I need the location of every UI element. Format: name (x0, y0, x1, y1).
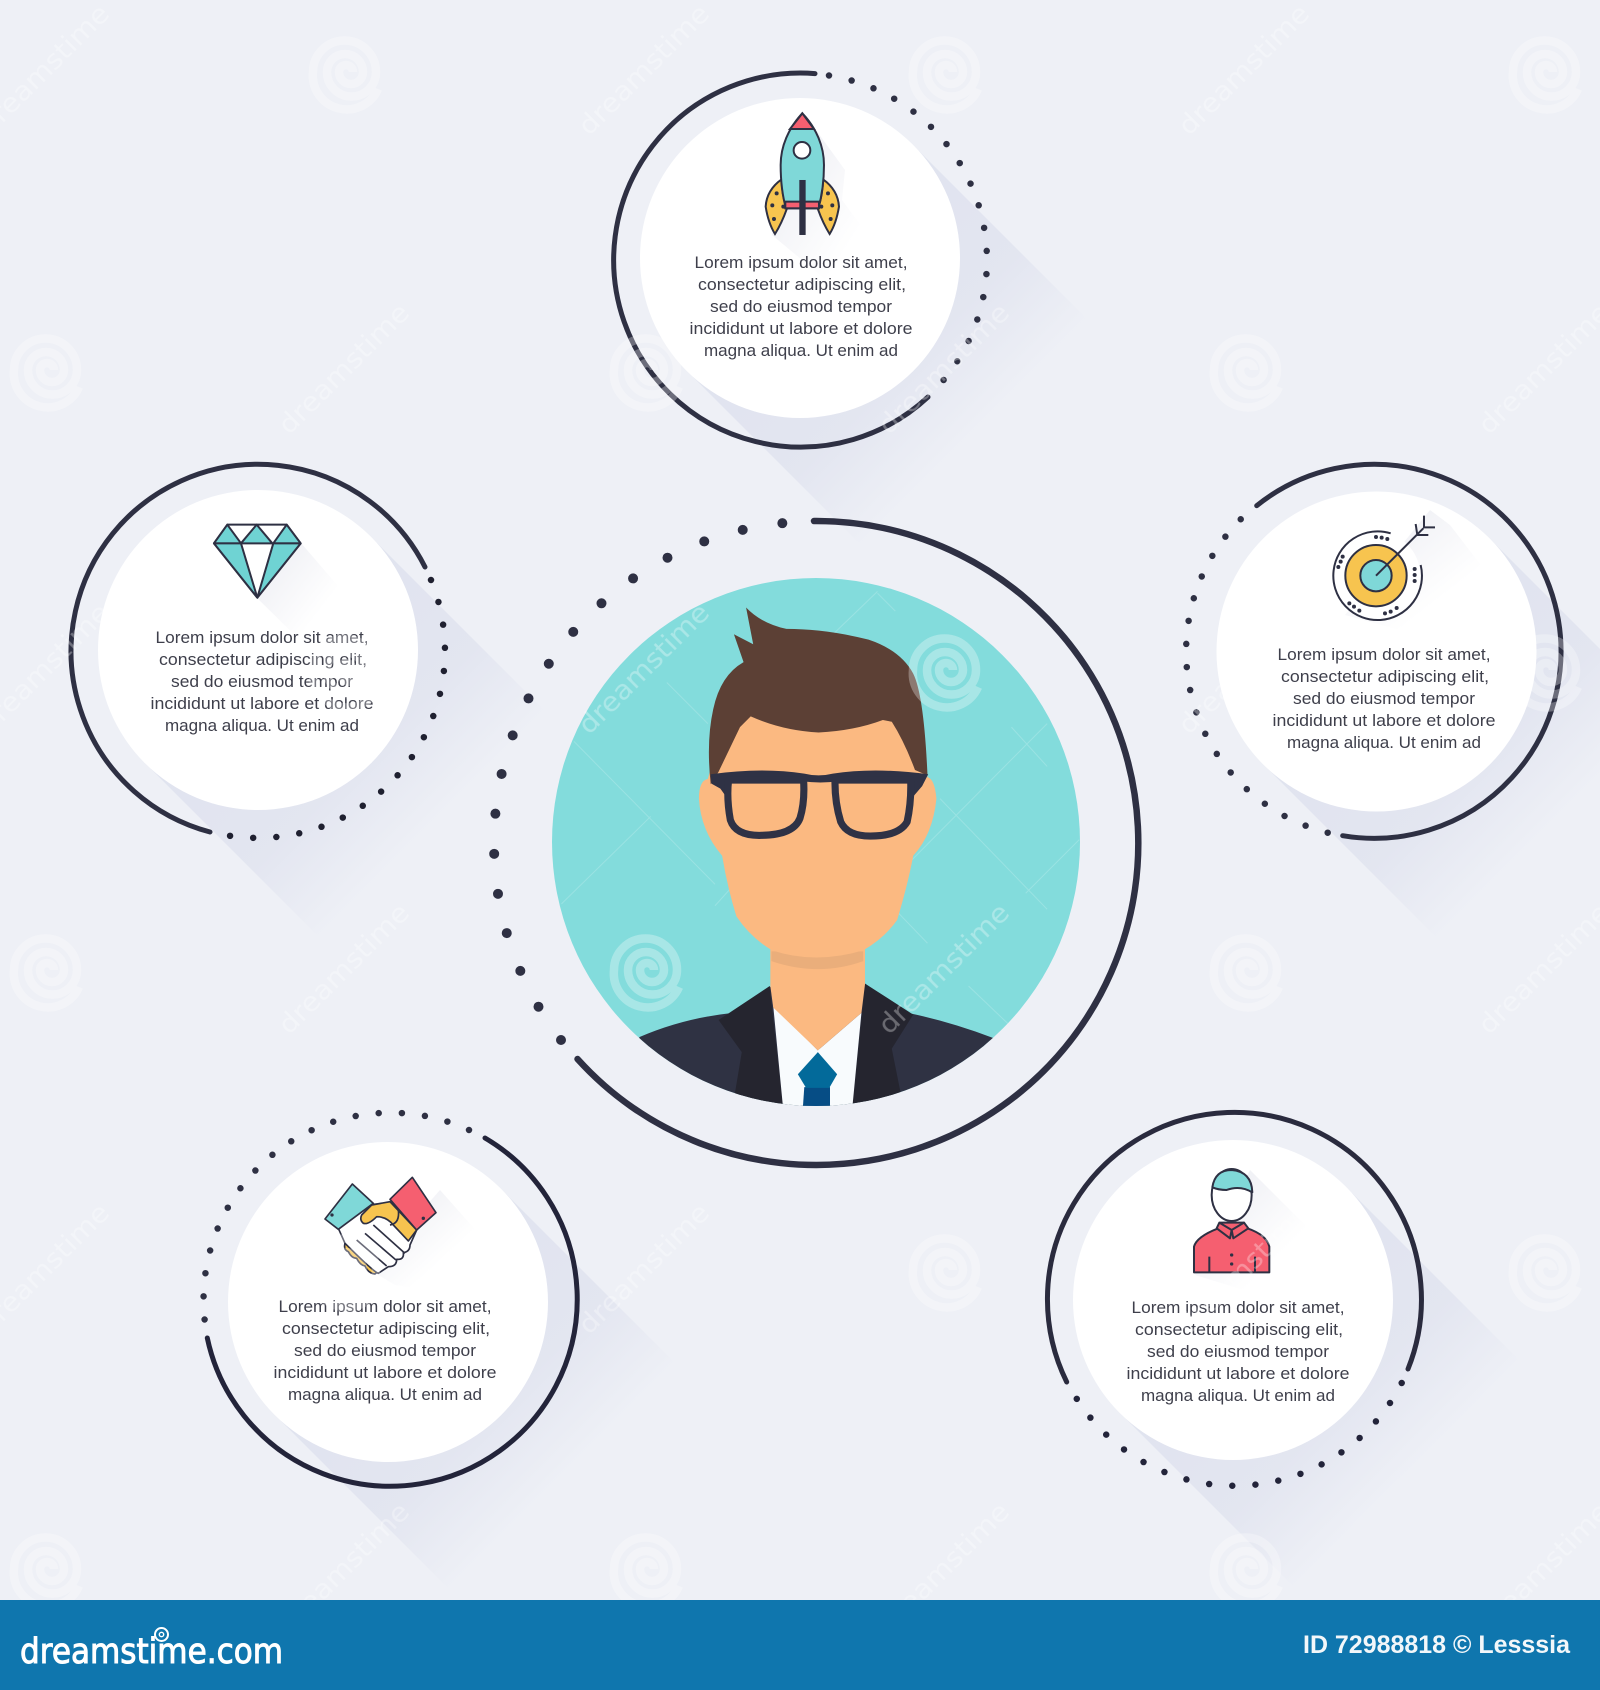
text block: magna aliqua. Ut enim ad (1287, 733, 1481, 752)
watermark overlay: dreamstime (872, 297, 1016, 441)
avatar figure (561, 591, 1079, 1141)
icon shadow (370, 1190, 480, 1290)
text block: consectetur adipiscing elit, (1281, 667, 1489, 686)
text block: sed do eiusmod tempor (294, 1341, 476, 1360)
text block: incididunt ut labore et dolore (1272, 711, 1496, 730)
ring dotted arc (204, 1113, 469, 1323)
ring solid arc (207, 1138, 577, 1486)
text block: Lorem ipsum dolor sit amet, (694, 253, 908, 272)
icon: handshake (325, 1177, 436, 1274)
ring dotted arc (228, 580, 445, 838)
shirt collar (773, 1006, 861, 1106)
ring dotted arc (829, 76, 987, 383)
watermark overlay: dreamstime (872, 1496, 1016, 1640)
watermark overlay: dreamstime (1172, 0, 1316, 142)
text block: sed do eiusmod tempor (1293, 689, 1475, 708)
text block: magna aliqua. Ut enim ad (704, 341, 898, 360)
ring solid arc (1047, 1112, 1421, 1382)
suit (639, 984, 993, 1106)
tie (803, 1087, 830, 1106)
white disc (1073, 1140, 1393, 1460)
text block: Lorem ipsum dolor sit amet, (1278, 645, 1490, 664)
watermark overlay: dreamstime (872, 897, 1016, 1041)
text block (150, 628, 374, 735)
text block: Lorem ipsum dolor sit amet, (278, 1297, 492, 1316)
ring solid arc (614, 73, 928, 447)
glasses (711, 771, 928, 836)
hair (709, 607, 927, 784)
watermark overlay: dreamstime (272, 297, 416, 441)
icon: diamond (214, 525, 301, 598)
long shadow (687, 145, 1153, 611)
white disc (98, 490, 418, 810)
text block: consectetur adipiscing elit, (1135, 1320, 1343, 1339)
head (699, 713, 936, 957)
icon: target (1332, 516, 1435, 620)
icon: rocket (766, 113, 839, 235)
ring dotted arc (1186, 517, 1328, 833)
panel: diamond (71, 464, 611, 1003)
white disc (228, 1142, 548, 1462)
neck (770, 941, 865, 1050)
text block: sed do eiusmod tempor (710, 297, 892, 316)
panel: target (1186, 464, 1600, 1004)
teal disc (552, 578, 1080, 1106)
panel: handshake (204, 1113, 741, 1655)
text block: Lorem ipsum dolor sit amet, (1132, 1298, 1344, 1317)
watermark overlay: dreamstime (572, 1197, 716, 1341)
long shadow (1263, 538, 1600, 1004)
text block (690, 253, 912, 360)
long shadow (145, 537, 611, 1003)
text block: sed do eiusmod tempor (1147, 1342, 1329, 1361)
text block: Lorem ipsum dolor sit amet, (156, 628, 368, 647)
lapels (719, 984, 913, 1106)
icon shadow (772, 115, 890, 300)
text block: magna aliqua. Ut enim ad (165, 716, 359, 735)
white disc (1216, 492, 1536, 812)
text block: consectetur adipiscing elit, (698, 275, 906, 294)
watermark overlay: dreamstime (572, 597, 716, 741)
icon shadow (1345, 510, 1500, 630)
panel: person (1047, 1112, 1586, 1653)
ring solid arc (71, 464, 425, 832)
watermark overlay: dreamstime (572, 0, 716, 142)
long shadow (275, 1189, 741, 1655)
text block: incididunt ut labore et dolore (274, 1363, 496, 1382)
text block (1126, 1298, 1350, 1405)
watermark overlay: dreamstime (1172, 597, 1316, 741)
text block: incididunt ut labore et dolore (150, 694, 374, 713)
ring dotted arc (1075, 1383, 1402, 1486)
neck shadow (771, 951, 863, 969)
icon shadow (1195, 1170, 1320, 1295)
text block (274, 1297, 496, 1404)
panel: rocket (614, 73, 1153, 611)
text block: consectetur adipiscing elit, (159, 650, 367, 669)
text block: sed do eiusmod tempor (171, 672, 353, 691)
footer logo: dreamstime.com (20, 1632, 283, 1672)
watermark overlay: dreamstime (272, 897, 416, 1041)
text block: incididunt ut labore et dolore (1126, 1364, 1350, 1383)
watermark overlay: dreamstime (272, 1496, 416, 1640)
text block (1272, 645, 1496, 752)
text block: consectetur adipiscing elit, (282, 1319, 490, 1338)
text block: magna aliqua. Ut enim ad (1141, 1386, 1335, 1405)
icon: user (1194, 1169, 1269, 1272)
ring solid arc (1257, 464, 1561, 838)
icon shadow (257, 530, 350, 650)
ring dotted arc (494, 523, 784, 1040)
footer credit: ID 72988818 © Lesssia (1303, 1631, 1571, 1659)
panel: central avatar (494, 521, 1138, 1165)
long shadow (1120, 1187, 1586, 1653)
white disc (640, 98, 960, 418)
ring solid arc (578, 521, 1138, 1165)
text block: magna aliqua. Ut enim ad (288, 1385, 482, 1404)
text block: incididunt ut labore et dolore (690, 319, 912, 338)
footer bar (0, 1600, 1600, 1690)
watermark overlay: dreamstime (1172, 1197, 1316, 1341)
